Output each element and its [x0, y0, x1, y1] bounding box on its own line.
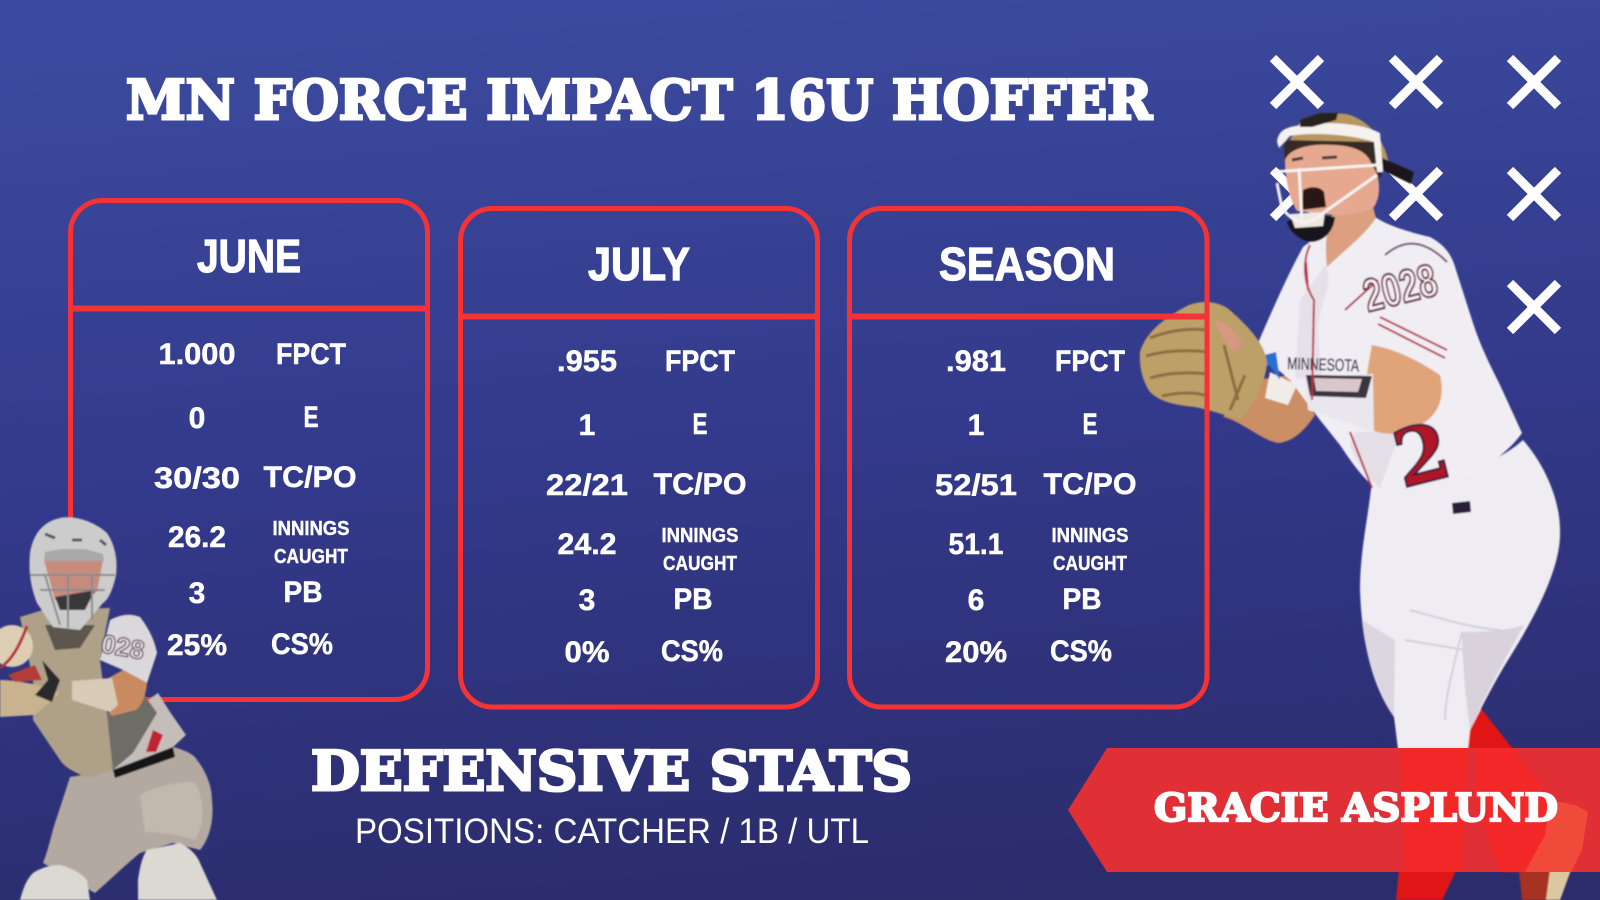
wrist tape [1265, 372, 1297, 405]
knee seams [1405, 610, 1500, 720]
stat rows: E [304, 401, 318, 434]
pants logo [1452, 501, 1471, 514]
front shin shading [1462, 625, 1524, 730]
sleeve [100, 615, 157, 683]
belt [113, 747, 175, 778]
stat rows: CAUGHT [274, 546, 348, 568]
stat rows: FPCT [665, 345, 735, 378]
stat rows: 3 [579, 584, 595, 617]
stat rows: 52/51 [935, 469, 1017, 502]
armband screen [1314, 378, 1362, 392]
heading: JUNE [197, 230, 301, 282]
stat rows: TC/PO [264, 461, 356, 494]
player name: GRACIE ASPLUND [1154, 785, 1558, 830]
stat rows: 30/30 [154, 462, 240, 495]
cleat sole [1546, 870, 1571, 900]
glove [1140, 302, 1267, 420]
section heading: DEFENSIVE STATS [311, 739, 912, 803]
cleat visible through banner [1525, 800, 1588, 872]
jersey stripes [1305, 245, 1447, 488]
stat rows [154, 338, 356, 662]
panel: june [70, 200, 428, 700]
mitt wrist strap [35, 660, 60, 702]
stat rows: CS% [271, 628, 333, 661]
team lettering: MINNESOTA [1287, 354, 1360, 376]
helmet [29, 517, 117, 630]
stat rows: 26.2 [168, 521, 226, 554]
face cage [1272, 165, 1377, 222]
pants [43, 747, 212, 893]
armband device [1306, 375, 1372, 398]
stat rows: 0% [564, 636, 610, 669]
stat rows: 6 [968, 584, 984, 617]
hand [8, 665, 42, 682]
front leg red sock [1396, 745, 1470, 900]
ball seam [0, 626, 27, 668]
placket shadow [1295, 265, 1328, 380]
stat rows: PB [284, 576, 322, 609]
stat rows: 22/21 [546, 469, 628, 502]
visor [1277, 123, 1383, 172]
baseball [0, 625, 33, 667]
helmet cage [30, 575, 115, 628]
photo: catcher in gear [0, 517, 217, 900]
pants [1360, 440, 1560, 749]
lower jersey [113, 693, 186, 770]
rear mask strap [1380, 157, 1414, 184]
stat rows: 25% [167, 629, 227, 662]
stat rows: E [1082, 408, 1098, 441]
heading: JULY [588, 238, 690, 290]
eyes [1292, 157, 1337, 160]
neck [1326, 207, 1376, 267]
stat rows: PB [674, 583, 712, 616]
heading: SEASON [939, 238, 1115, 290]
chin strap [1287, 213, 1335, 242]
title: MN FORCE IMPACT 16U HOFFER [126, 68, 1153, 132]
wrist wrap [72, 678, 118, 712]
glove creases [1146, 329, 1245, 410]
stat rows: FPCT [276, 338, 346, 371]
face [44, 560, 103, 600]
stat rows: .955 [557, 345, 617, 378]
stat rows: PB [1062, 583, 1102, 616]
stat rows: 24.2 [558, 528, 616, 561]
stat rows: INNINGS [1052, 525, 1128, 547]
stat rows [935, 345, 1136, 669]
panel outline [850, 208, 1207, 707]
upper arm [1365, 345, 1442, 434]
panel outline [70, 200, 428, 700]
divider [70, 306, 428, 312]
stat rows: 0 [189, 402, 205, 435]
divider [460, 314, 818, 320]
stat rows: CAUGHT [1053, 553, 1127, 575]
visor clip [1300, 113, 1338, 127]
divider [849, 314, 1207, 320]
stat rows: .981 [946, 345, 1006, 378]
panel: july [460, 208, 818, 707]
collar [45, 625, 95, 650]
jersey red mark [146, 730, 163, 752]
banner shape [1068, 748, 1600, 872]
rear thigh shading [1362, 620, 1395, 717]
sleeve number: 028 [99, 628, 147, 665]
stat rows: 3 [189, 577, 205, 610]
glove [0, 680, 60, 717]
face shadow [55, 590, 95, 610]
fingers [1215, 320, 1242, 352]
positions line: POSITIONS: CATCHER / 1B / UTL [355, 812, 869, 851]
photo: shouting fielder in white uniform [1140, 113, 1571, 900]
stat rows [546, 345, 746, 669]
panel: season [849, 208, 1207, 707]
helmet vents [45, 534, 106, 545]
shoulder seam [1385, 244, 1447, 262]
protector side [107, 693, 157, 770]
stat rows: CS% [1050, 635, 1112, 668]
face [1285, 145, 1379, 215]
helmet brow [44, 549, 104, 561]
stat rows: 20% [945, 636, 1007, 669]
jersey [1255, 215, 1522, 488]
sleeve number: 2028 [1358, 253, 1442, 322]
stat rows: TC/PO [654, 468, 746, 501]
name banner [1068, 748, 1600, 872]
open mouth [1302, 187, 1326, 210]
panel outline [460, 208, 818, 707]
chest protector [20, 608, 113, 778]
forearm [1223, 375, 1315, 443]
knee pad left [20, 865, 90, 900]
stat rows: CS% [661, 635, 723, 668]
decorative x marks [1273, 58, 1558, 331]
lower jersey shadow [1350, 432, 1400, 488]
stat rows: 51.1 [948, 528, 1004, 561]
stat rows: 1 [968, 409, 984, 442]
stat rows: FPCT [1055, 345, 1125, 378]
stat rows: E [692, 408, 708, 441]
rear leg red sock [1462, 706, 1562, 872]
back number: 2 [1385, 405, 1459, 506]
stat rows: 1 [579, 409, 595, 442]
sock visible through banner [1400, 748, 1562, 872]
shadow under visor [1284, 140, 1382, 185]
cleat [1519, 870, 1571, 900]
arm [100, 670, 147, 716]
pants highlight [140, 782, 202, 840]
stat rows: TC/PO [1044, 468, 1136, 501]
knee pad right [138, 843, 217, 900]
mouth guard [1290, 212, 1325, 228]
hair [1290, 113, 1389, 172]
stat rows: 1.000 [158, 338, 236, 371]
wrist sleeve [1305, 374, 1374, 432]
stat rows: INNINGS [272, 518, 350, 540]
stat rows: INNINGS [662, 525, 738, 547]
stat rows: CAUGHT [663, 553, 737, 575]
blue lace [1246, 352, 1280, 380]
